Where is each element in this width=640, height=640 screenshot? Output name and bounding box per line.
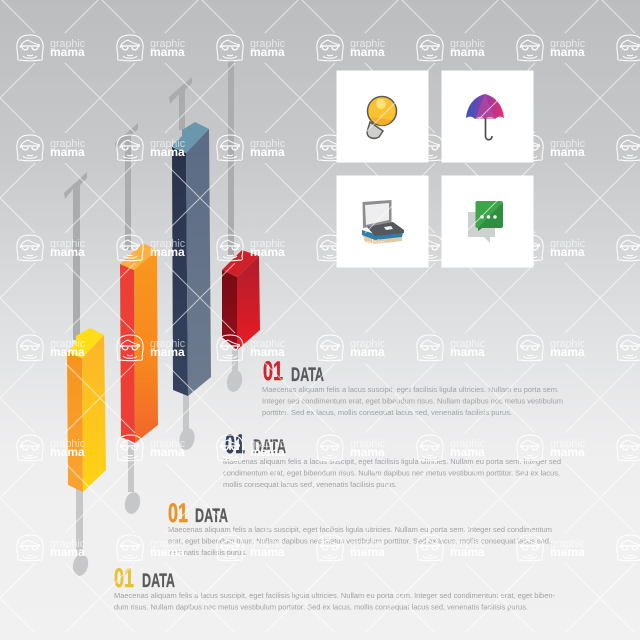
watermark: repeated logos: graphic — [250, 538, 286, 550]
watermark: repeated logos: graphic — [450, 338, 486, 350]
text block: orange data section: Maecenas aliquam felis a lacus suscipit, eget facilisis ligula ultricies. Nullam eu porta sem. Integer sed condimentum — [168, 527, 552, 534]
watermark: repeated logos: graphic — [450, 138, 486, 150]
watermark: repeated logos: graphic — [450, 238, 486, 250]
watermark: repeated logos: graphic — [150, 238, 186, 250]
text block: yellow data section: 01 — [114, 563, 134, 593]
watermark: repeated logos: graphic — [50, 338, 86, 350]
watermark: repeated logos: graphic — [250, 438, 286, 450]
watermark: repeated logos: mama — [250, 345, 285, 359]
text block: yellow data section: DATA — [142, 570, 175, 592]
text block: navy data section: 01 — [225, 429, 245, 459]
watermark: repeated logos: graphic — [50, 538, 86, 550]
watermark: repeated logos: mama — [150, 245, 185, 259]
watermark: repeated logos: graphic — [250, 338, 286, 350]
watermark: repeated logos: mama — [350, 345, 385, 359]
watermark: repeated logos: mama — [450, 145, 485, 159]
watermark: repeated logos: graphic — [350, 38, 386, 50]
column: red — [222, 250, 260, 350]
text block: yellow data section — [114, 563, 556, 612]
text block: navy data section: Maecenas aliquam felis a lacus suscipit, eget facilisis ligula ultricies. Nullam eu porta sem. Integer sed — [223, 459, 561, 466]
watermark: repeated logos: graphic — [250, 38, 286, 50]
bar chart: four isometric columns on poles — [64, 60, 260, 577]
watermark: repeated logos: mama — [50, 545, 85, 559]
text block: navy data section: mollis consequat lacus sed, venenatis facilisis purus. — [223, 482, 397, 489]
watermark: repeated logos: graphic — [550, 38, 586, 50]
watermark: repeated logos: graphic — [250, 138, 286, 150]
watermark: repeated logos: graphic — [150, 138, 186, 150]
watermark: repeated logos: graphic — [450, 38, 486, 50]
watermark: repeated logos: graphic — [550, 438, 586, 450]
watermark: repeated logos: mama — [550, 445, 585, 459]
watermark: repeated logos — [17, 35, 640, 561]
watermark: repeated logos: graphic — [50, 238, 86, 250]
watermark: repeated logos: mama — [450, 445, 485, 459]
watermark: repeated logos: mama — [550, 545, 585, 559]
text block: red data section: porttitor. Sed ex lacus, mollis consequat lacus sed, venenatis facilisis purus. — [262, 410, 512, 417]
watermark: repeated logos: graphic — [150, 338, 186, 350]
icon tile: umbrella — [442, 70, 534, 162]
watermark: repeated logos: mama — [450, 245, 485, 259]
watermark: repeated logos: graphic — [150, 538, 186, 550]
panel: icon tile grid — [336, 70, 534, 268]
watermark: repeated logos: mama — [450, 545, 485, 559]
watermark: repeated logos: graphic — [350, 438, 386, 450]
pole: yellow column — [64, 172, 90, 577]
watermark: repeated logos: mama — [150, 545, 185, 559]
watermark: repeated logos: graphic — [150, 38, 186, 50]
watermark: repeated logos: graphic — [550, 138, 586, 150]
column: navy — [172, 122, 211, 396]
watermark: repeated logos: graphic — [350, 138, 386, 150]
watermark: repeated logos: graphic — [50, 438, 86, 450]
watermark: repeated logos: mama — [50, 45, 85, 59]
watermark: repeated logos: mama — [250, 245, 285, 259]
watermark: repeated logos: mama — [150, 45, 185, 59]
watermark: repeated logos: mama — [250, 545, 285, 559]
column: yellow — [67, 328, 106, 492]
watermark: repeated logos: graphic — [450, 438, 486, 450]
watermark: repeated logos: graphic — [150, 438, 186, 450]
icon tile: light bulb — [336, 70, 428, 162]
watermark: repeated logos: graphic — [50, 38, 86, 50]
watermark: repeated logos: mama — [350, 545, 385, 559]
text block: red data section: Integer sed condimentum erat, eget bibendum risus. Nullam dapibus nec metus vestibulum — [262, 398, 563, 406]
text block: red data section: DATA — [291, 364, 324, 386]
icon tile: chat bubbles — [442, 176, 534, 268]
watermark: repeated logos: mama — [350, 445, 385, 459]
watermark: repeated logos: mama — [50, 445, 85, 459]
text block: orange data section: venenatis facilisis purus. — [168, 550, 247, 557]
watermark: repeated logos: mama — [250, 445, 285, 459]
watermark: repeated logos: graphic — [250, 238, 286, 250]
watermark: repeated logos: mama — [50, 145, 85, 159]
watermark: repeated logos: mama — [550, 345, 585, 359]
watermark: repeated logos: mama — [250, 45, 285, 59]
text block: red data section — [262, 356, 563, 417]
watermark: repeated logos: mama — [50, 245, 85, 259]
text block: yellow data section: Maecenas aliquam felis a lacus suscipit, eget facilisis ligula ultricies. Nullam eu porta sem. Integer sed condimentum erat, eget biben- — [114, 593, 556, 600]
text block: orange data section — [168, 498, 552, 557]
watermark: repeated logos: graphic — [550, 538, 586, 550]
text block: yellow data section: dum risus. Nullam dapibus nec metus vestibulum porttitor. Sed ex lacus, mollis consequat lacus sed, venenatis facilisis purus. — [114, 604, 528, 612]
watermark: repeated logos: mama — [50, 345, 85, 359]
text block: orange data section: 01 — [168, 498, 188, 528]
watermark: repeated logos: mama — [150, 345, 185, 359]
watermark: repeated logos: mama — [550, 245, 585, 259]
pole: red column — [225, 60, 244, 393]
watermark: repeated logos: mama — [550, 45, 585, 59]
watermark: repeated logos: mama — [450, 345, 485, 359]
pole: orange column — [115, 123, 142, 515]
watermark: repeated logos: graphic — [350, 238, 386, 250]
watermark: repeated logos: mama — [150, 145, 185, 159]
watermark: repeated logos: mama — [350, 245, 385, 259]
watermark: repeated logos: graphic — [50, 138, 86, 150]
watermark: repeated logos: graphic — [450, 538, 486, 550]
watermark: repeated logos: graphic — [350, 338, 386, 350]
icon tile: laptop on books — [336, 176, 428, 268]
column: orange-red — [120, 243, 158, 443]
watermark: repeated logos: mama — [350, 145, 385, 159]
watermark: repeated logos: mama — [350, 45, 385, 59]
watermark: repeated logos: mama — [550, 145, 585, 159]
text block: navy data section: DATA — [253, 436, 286, 458]
text block: orange data section: erat, eget bibendum risus. Nullam dapibus nec metus vestibulum porttitor. Sed ex lacus, mollis consequat lacus sed, — [168, 538, 551, 546]
text block: red data section: 01 — [263, 356, 283, 386]
text block: navy data section — [223, 429, 561, 489]
watermark: repeated logos: graphic — [550, 238, 586, 250]
text block: navy data section: condimentum erat, eget bibendum risus. Nullam dapibus nec metus vestibulum porttitor. Sed ex lacus, — [223, 470, 560, 478]
watermark: repeated logos: graphic — [550, 338, 586, 350]
watermark: repeated logos: mama — [450, 45, 485, 59]
pole: navy column — [169, 77, 197, 451]
watermark: repeated logos: graphic — [350, 538, 386, 550]
text block: orange data section: DATA — [195, 505, 228, 527]
text block: red data section: Maecenas aliquam felis a lacus suscipit, eget facilisis ligula ultricies. Nullam eu porta sem. — [262, 387, 559, 394]
watermark: repeated logos: mama — [250, 145, 285, 159]
watermark: repeated logos: mama — [150, 445, 185, 459]
